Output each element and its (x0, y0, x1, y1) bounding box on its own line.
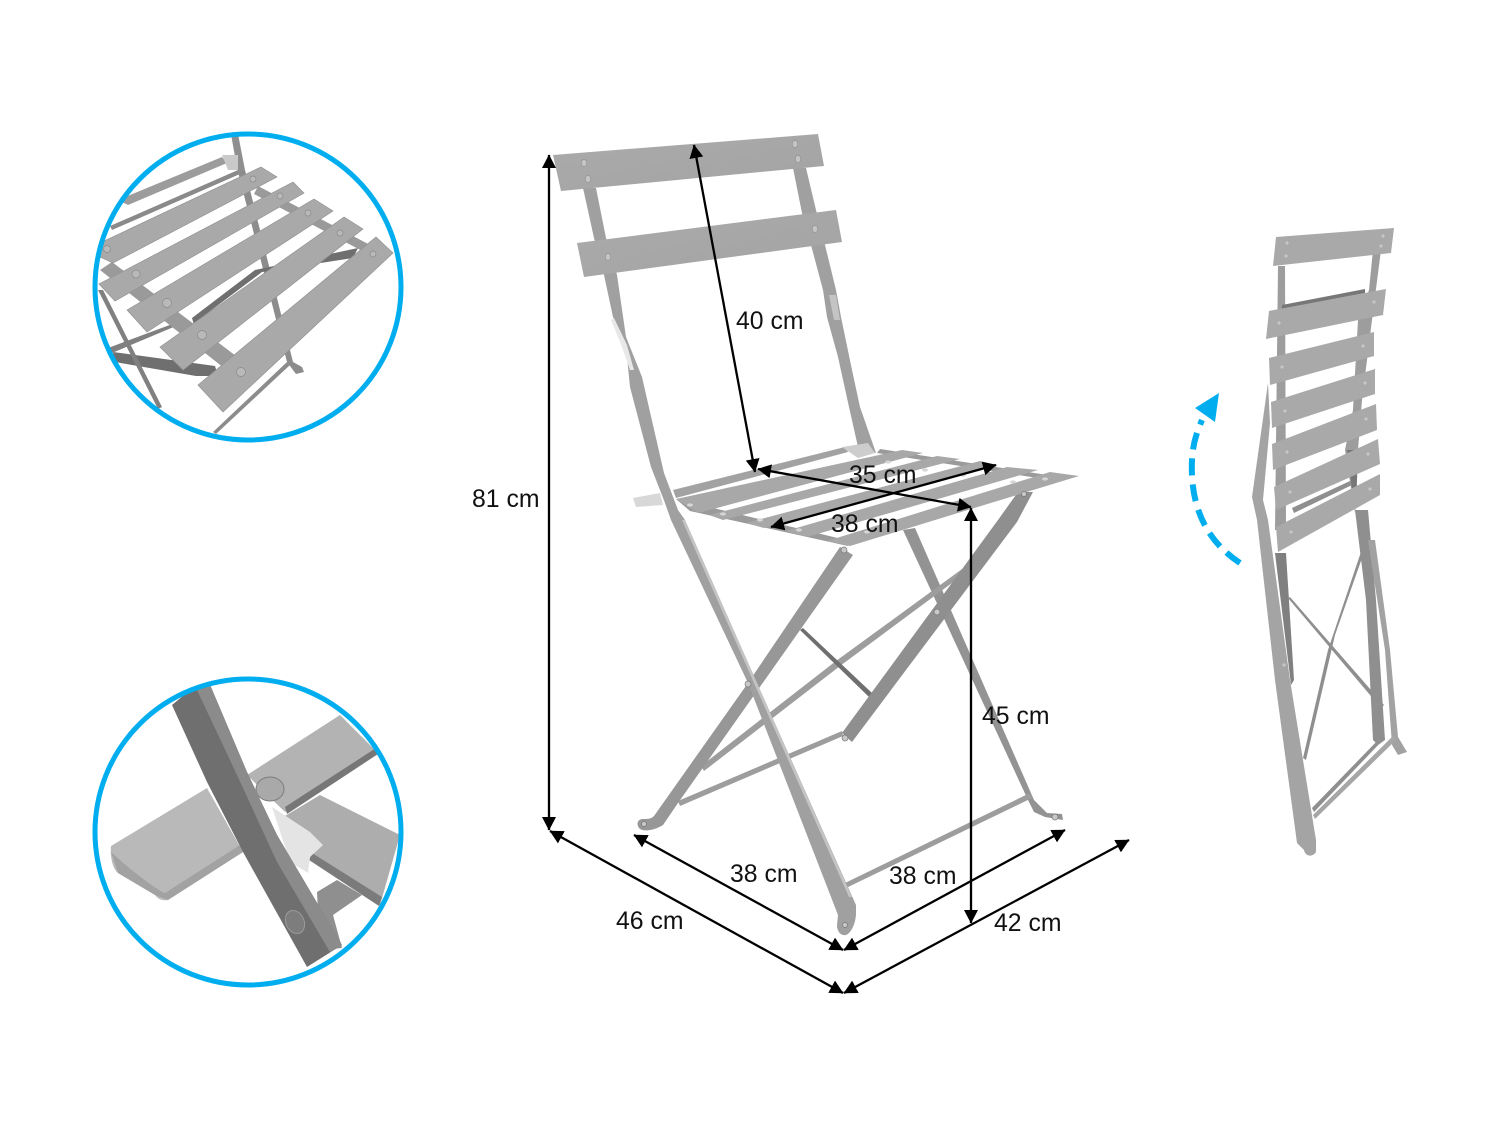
dimension arrows (549, 145, 1129, 993)
arrow: 38 cm base left (634, 835, 843, 950)
label: 35 cm: 35 cm (849, 462, 917, 489)
upper slat and front end (247, 715, 378, 812)
dimension labels (472, 308, 1062, 937)
arrow: 38 cm base right (844, 830, 1065, 950)
leg pins (642, 492, 1058, 928)
detail circle: seat slats (85, 134, 401, 440)
band oval (285, 910, 306, 934)
back slat rivets (581, 140, 818, 261)
label: 38 cm right: 38 cm (889, 863, 957, 890)
back slats (553, 134, 842, 277)
label: 46 cm: 46 cm (616, 908, 684, 935)
arrow: 40 cm back height (694, 145, 755, 472)
circle ring (95, 134, 401, 440)
seat slats (85, 167, 393, 412)
circle ring (95, 679, 401, 985)
arrow: 35 cm seat depth (758, 469, 971, 507)
back frame of seat (633, 443, 1060, 546)
main chair (553, 134, 1079, 935)
slat rivets (104, 176, 376, 376)
folded chair rivets (1277, 234, 1385, 667)
back uprights (793, 168, 876, 453)
arrow: 46 cm depth (550, 831, 843, 993)
label: 81 cm: 81 cm (472, 486, 540, 513)
folded chair slats (1266, 228, 1394, 552)
detail circle: hinge (95, 679, 401, 985)
label: 42 cm: 42 cm (994, 910, 1062, 937)
thin braces (678, 553, 1032, 888)
folded chair braces (1282, 289, 1397, 819)
lower rod (317, 880, 362, 950)
seat rivets (687, 460, 1048, 534)
label: 38 cm seat: 38 cm (831, 511, 899, 538)
rear support leg (842, 492, 1033, 742)
pivot rivet (256, 777, 284, 801)
folded chair (1252, 228, 1407, 856)
arrow: 81 cm height (548, 155, 550, 830)
left upright and main front leg (583, 188, 856, 935)
arrow: 42 cm width (844, 840, 1129, 993)
under-seat legs and straps (98, 170, 358, 434)
white plastic bracket (272, 807, 323, 873)
label: 40 cm: 40 cm (736, 308, 804, 335)
arrow: 45 cm seat height (970, 508, 972, 923)
leg highlight (611, 318, 634, 370)
label: 38 cm left: 38 cm (730, 861, 798, 888)
back frame bars (110, 134, 245, 230)
far back leg (903, 528, 1063, 820)
folded chair legs (1252, 250, 1407, 856)
arrow: 38 cm seat width (771, 465, 996, 527)
front support leg (638, 547, 853, 830)
arrow: folding direction (1192, 393, 1240, 563)
seat slats (676, 450, 1079, 546)
metal leg band (172, 680, 342, 967)
lower right slat (285, 795, 400, 905)
label: 45 cm: 45 cm (982, 703, 1050, 730)
seat side rails (254, 186, 368, 250)
